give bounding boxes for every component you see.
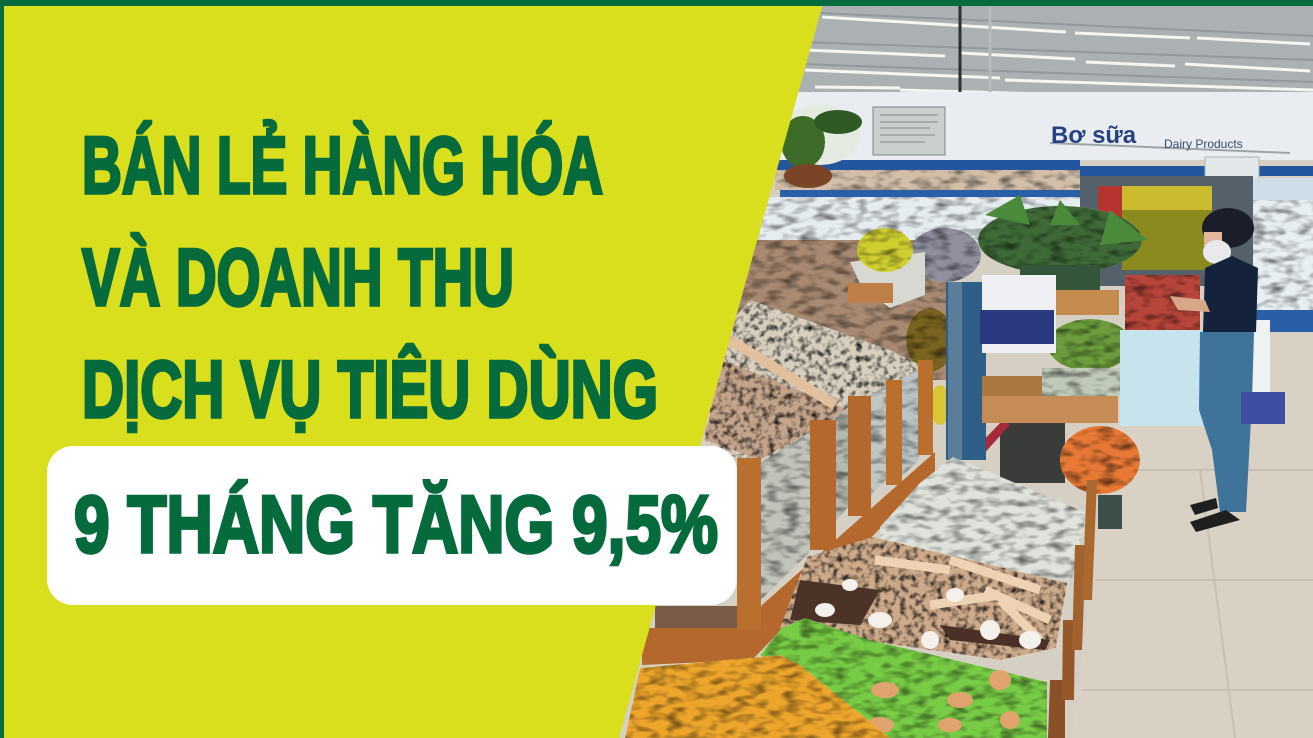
produce stalls xyxy=(625,300,1097,738)
upper stall goods xyxy=(704,300,930,460)
supermarket photo xyxy=(620,0,1313,738)
title: BÁN LẺ HÀNG HÓA xyxy=(82,119,603,211)
right side wooden posts xyxy=(1048,680,1065,738)
plant and flowers xyxy=(780,105,1200,529)
sign: dairy: Bơ sữa xyxy=(1051,122,1137,149)
floor xyxy=(1072,335,1313,738)
mid shelves backdrop xyxy=(720,240,946,380)
wooden frame xyxy=(655,606,742,630)
ceiling xyxy=(790,6,1313,200)
yellow-green panel xyxy=(0,0,824,738)
sign: dairy xyxy=(1051,122,1243,151)
title: DỊCH VỤ TIÊU DÙNG xyxy=(82,343,658,435)
orange packs xyxy=(625,655,890,738)
back wall xyxy=(760,92,1313,332)
highlight pill: 9 THÁNG TĂNG 9,5% xyxy=(74,480,718,570)
title: VÀ DOANH THU xyxy=(82,233,514,323)
display stand and sign xyxy=(946,275,1270,460)
staff member xyxy=(1170,208,1285,532)
highlight pill xyxy=(47,446,737,605)
glass panes xyxy=(761,432,810,600)
green packs xyxy=(760,618,1047,738)
title xyxy=(82,119,658,435)
packaged goods xyxy=(880,457,1087,580)
logs and mushrooms xyxy=(780,537,1067,660)
sign: dairy: Dairy Products xyxy=(1164,137,1243,151)
